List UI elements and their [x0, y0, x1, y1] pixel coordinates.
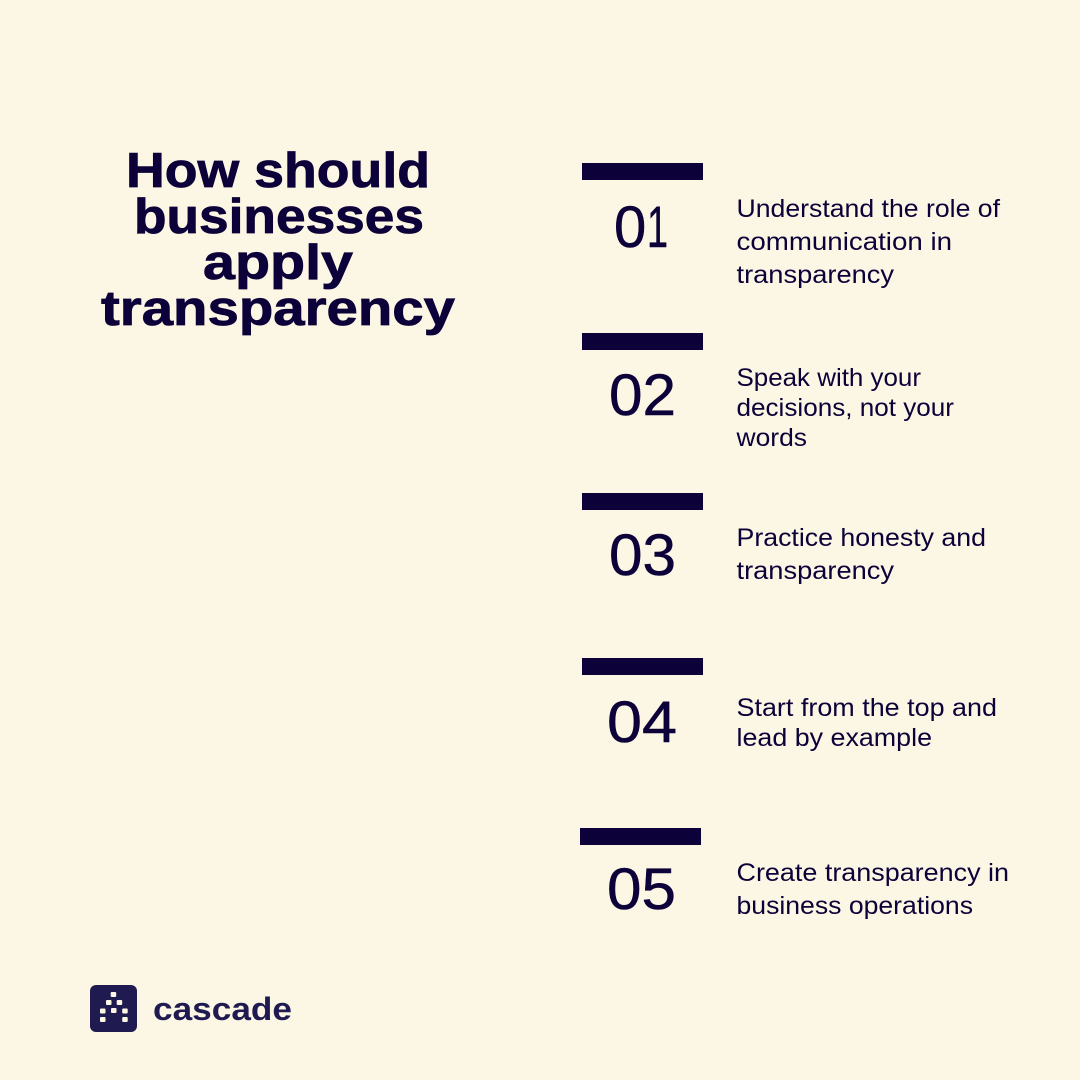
wordmark: cascade [153, 991, 292, 1027]
step 04: Start from the top and [736, 694, 997, 722]
step 04 [582, 658, 997, 755]
title [101, 144, 455, 336]
step 02: decisions, not your [736, 394, 954, 422]
step 01 [582, 163, 1000, 289]
step 03: 03 [609, 523, 676, 588]
step 05 [580, 828, 1009, 922]
step 05: business operations [736, 892, 973, 920]
icon: cascade mark [90, 985, 137, 1032]
step 02 [582, 333, 954, 452]
step 04: 04 [607, 690, 677, 755]
title: businesses [134, 190, 424, 244]
step 01: 1 [647, 195, 668, 260]
step 02: Speak with your [736, 364, 921, 392]
title: How should [126, 144, 430, 198]
step 05: Create transparency in [736, 859, 1009, 887]
step 03: transparency [736, 557, 895, 585]
title: apply [203, 236, 353, 290]
step 02: 02 [609, 363, 676, 428]
title: transparency [101, 282, 455, 336]
step 03 [582, 493, 986, 588]
step 05: 05 [607, 857, 676, 922]
step 01: transparency [736, 261, 895, 289]
step 01: communication in [736, 228, 952, 256]
step 02: words [735, 424, 807, 452]
step 01: Understand the role of [736, 195, 1000, 223]
step 01: 0 [614, 195, 646, 260]
step 04: lead by example [736, 724, 932, 752]
logo: cascade [90, 985, 292, 1032]
step 03: Practice honesty and [736, 524, 986, 552]
